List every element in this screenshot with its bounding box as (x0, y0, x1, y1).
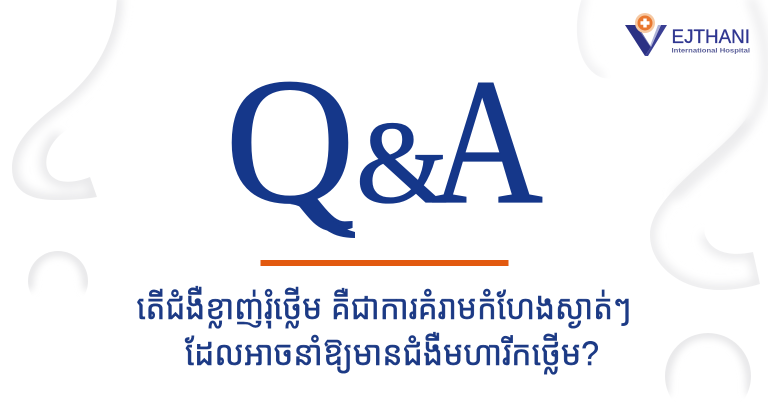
inner shading of lower body (577, 0, 760, 290)
logo wordmark: EJTHANI (672, 26, 750, 48)
ampersand: & (356, 97, 448, 228)
letter Q longer tail (290, 201, 355, 238)
logo tagline: International Hospital (672, 48, 750, 54)
decorative left question mark shape (12, 0, 117, 200)
orange divider bar (260, 260, 508, 266)
decorative left circle (28, 251, 88, 290)
logo icon: V mark with medical cross (625, 13, 667, 56)
question line 1: តើជំងឺខ្លាញ់រុំថ្លើម គឺជាការគំរាមកំហែងស្ងាត់ៗ (136, 286, 632, 329)
logo: Vejthani International Hospital (625, 13, 750, 56)
title: Q&A (225, 42, 543, 241)
letter A: A (431, 42, 543, 241)
outer shadow along right curve (675, 0, 766, 197)
question line 2: ដែលអាចនាំឱ្យមានជំងឺមហារីកថ្លើម? (185, 332, 599, 375)
decorative right question mark shape (577, 0, 766, 290)
decorative right circle (665, 333, 751, 395)
letter Q: Q (225, 42, 355, 240)
Khmer question text (136, 286, 632, 375)
